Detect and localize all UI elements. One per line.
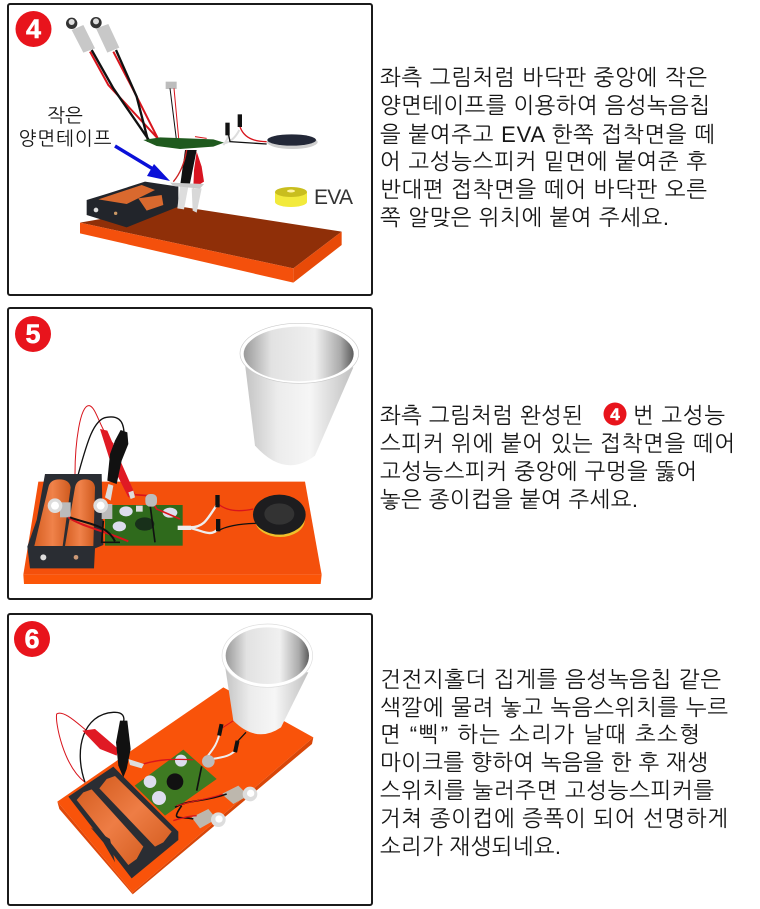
label: small double-sided tape second line: 양면테이프	[18, 129, 112, 150]
text block: step 4 instructions: 어 고성능스피커 밑면에 붙여준 후	[380, 149, 707, 174]
illustration: step 5 assembly	[23, 323, 359, 584]
text block: step 4 instructions	[380, 65, 715, 230]
text block: step 4 instructions: 반대편 접착면을 떼어 바닥판 오른	[380, 177, 707, 202]
panel: step 4	[8, 4, 372, 295]
text block: step 6 instructions	[380, 667, 728, 859]
text block: step 6 instructions: 마이크를 향하여 녹음을 한 후 재생	[380, 750, 708, 775]
text block: step 6 instructions: 건전지홀더 집게를 음성녹음칩 같은	[380, 667, 721, 692]
panel: step 5	[8, 308, 372, 599]
badge: inline number 4	[604, 402, 626, 426]
badge: inline number 4: 4	[610, 405, 620, 424]
text block: step 5 instructions: 좌측 그림처럼 완성된	[380, 403, 583, 428]
text block: step 4 instructions: 을 붙여주고 EVA 한쪽 접착면을 떼	[380, 122, 715, 147]
badge: number 5	[15, 316, 51, 352]
text block: step 6 instructions: 스위치를 눌러주면 고성능스피커를	[380, 778, 714, 803]
icon: EVA foam ring	[275, 187, 307, 207]
text block: step 4 instructions: 양면테이프를 이용하여 음성녹음칩	[380, 93, 710, 118]
text block: step 5 instructions: 번 고성능	[633, 403, 725, 428]
text block: step 6 instructions: 면 “삑” 하는 소리가 날때 초소형	[380, 722, 700, 747]
label: EVA: EVA	[314, 186, 353, 209]
panel: step 6	[8, 614, 372, 905]
text block: step 4 instructions: 쪽 알맞은 위치에 붙여 주세요.	[380, 205, 669, 230]
text block: step 6 instructions: 거쳐 종이컵에 증폭이 되어 선명하게	[380, 806, 728, 831]
badge: number 6: 6	[24, 624, 40, 654]
badge: number 4: 4	[26, 14, 41, 44]
text block: step 5 instructions: 놓은 종이컵을 붙여 주세요.	[380, 487, 638, 512]
label: small double-sided tape: 작은	[47, 106, 83, 127]
illustration: step 6 assembly	[56, 624, 313, 894]
text block: step 5 instructions: 고성능스피커 중앙에 구멍을 뚫어	[380, 459, 697, 484]
illustration: step 4 assembly	[66, 17, 342, 283]
arrow: points to tape	[115, 146, 170, 181]
badge: number 6	[14, 621, 50, 657]
text block: step 6 instructions: 소리가 재생되네요.	[380, 834, 561, 859]
text block: step 6 instructions: 색깔에 물려 놓고 녹음스위치를 누르	[380, 695, 728, 720]
text block: step 4 instructions: 좌측 그림처럼 바닥판 중앙에 작은	[380, 65, 707, 90]
badge: number 4	[16, 11, 52, 47]
badge: number 5: 5	[25, 319, 41, 349]
text block: step 5 instructions: 스피커 위에 붙어 있는 접착면을 떼어	[380, 431, 735, 456]
text block: step 5 instructions	[380, 402, 735, 512]
